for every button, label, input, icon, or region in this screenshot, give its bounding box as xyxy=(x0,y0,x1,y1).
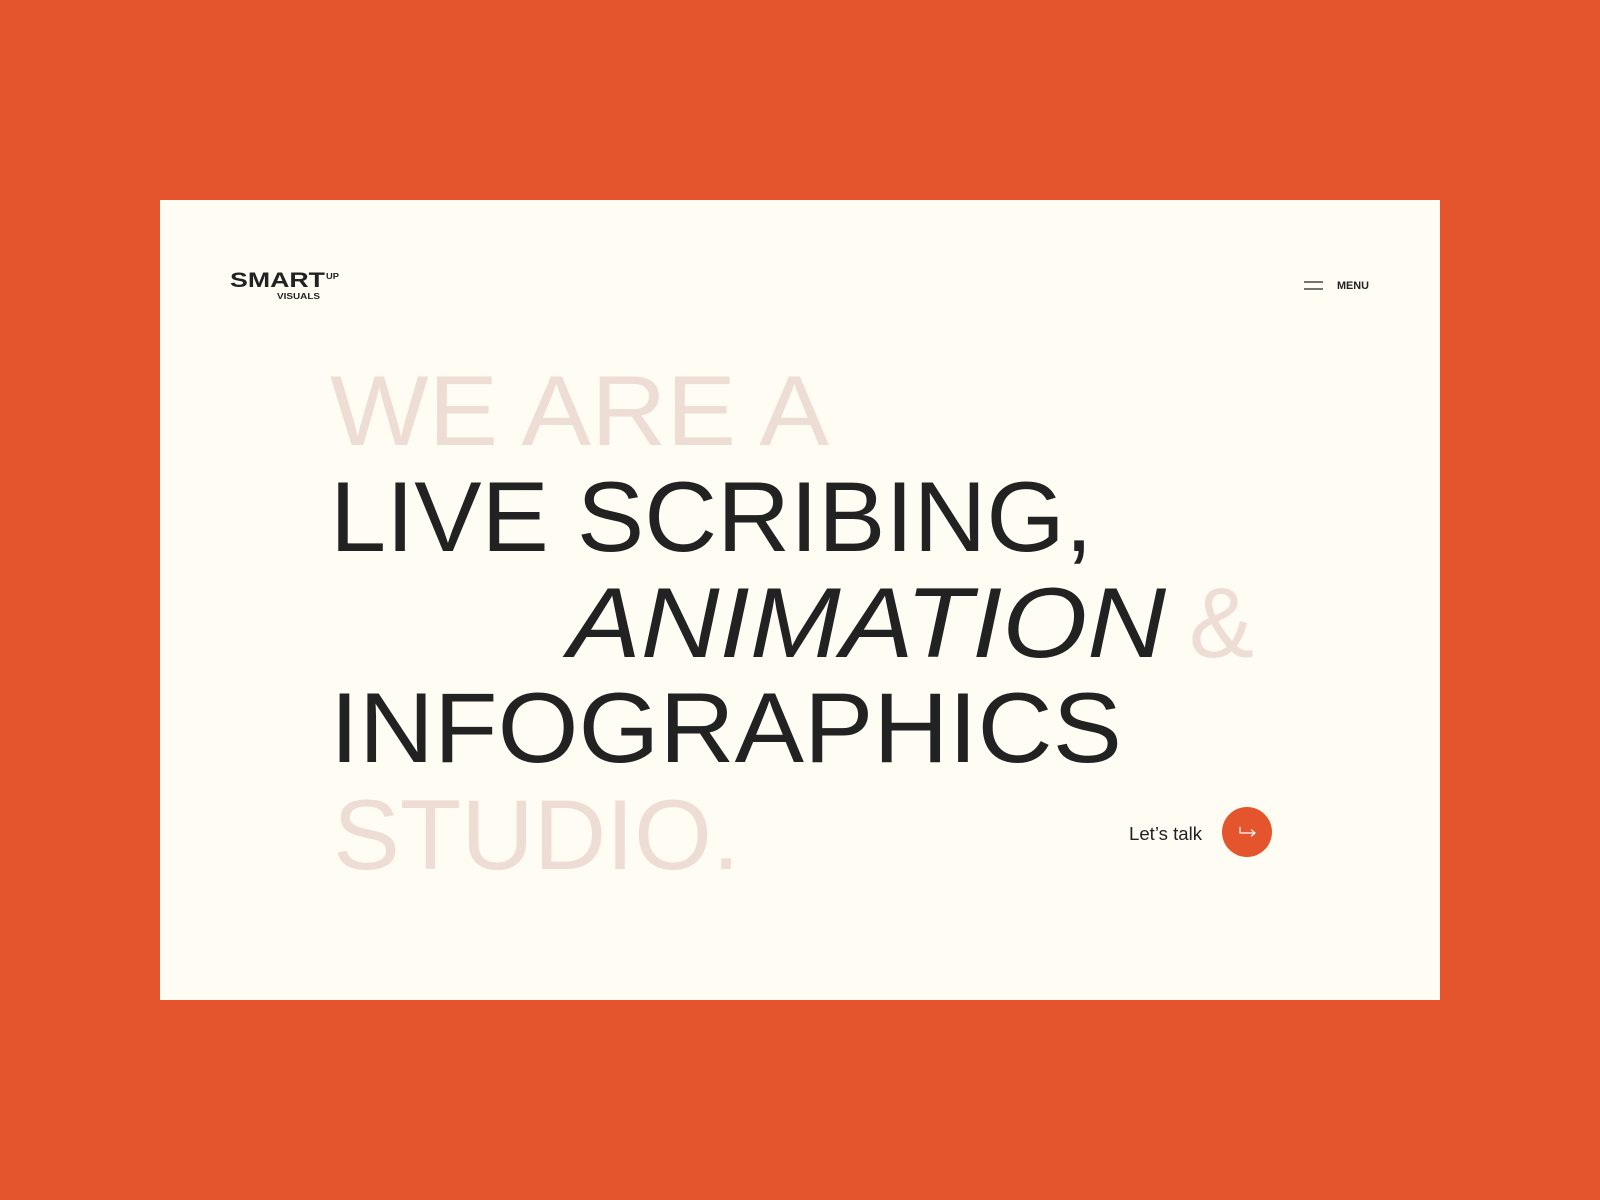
icon: arrow button xyxy=(1222,807,1272,857)
headline line 2: LIVE SCRIBING, xyxy=(330,461,1093,572)
headline line 3: ANIMATION xyxy=(562,567,1167,678)
logo: VISUALS xyxy=(277,292,321,301)
icon: hamburger xyxy=(1304,282,1323,289)
headline line 3: & xyxy=(1189,567,1254,678)
panel: hero card xyxy=(160,200,1440,1000)
logo: SMART xyxy=(230,269,325,292)
logo: UP xyxy=(326,272,340,281)
headline line 4: INFOGRAPHICS xyxy=(330,672,1122,783)
headline line 1: WE ARE A xyxy=(330,355,829,466)
menu button xyxy=(1304,280,1369,292)
logo xyxy=(230,269,340,301)
menu button: MENU xyxy=(1337,280,1369,292)
call to action: Let’s talk xyxy=(1129,824,1203,844)
call to action xyxy=(1129,807,1272,857)
headline xyxy=(330,355,1254,890)
headline line 5: STUDIO. xyxy=(333,779,740,890)
